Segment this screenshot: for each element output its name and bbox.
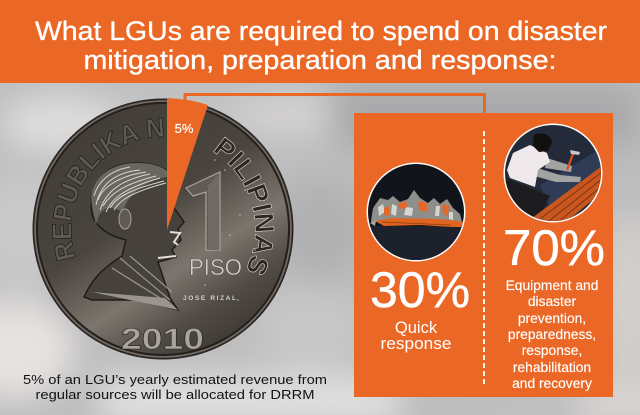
title: What LGUs are required to spend on disaster [35,16,607,46]
label: equipment and recovery: rehabilitation [513,360,591,375]
label: quick response: response [380,335,452,353]
numeral 1 [186,172,220,250]
one peso coin [32,98,294,360]
header banner [0,0,640,83]
label: equipment and recovery: prevention, [518,311,586,326]
title [35,16,607,75]
icon: rescue boat [366,162,466,262]
stat: 30 percent: 30% [370,262,470,318]
5% wedge: 5% [175,121,194,136]
label: quick response: Quick [395,319,438,337]
label: equipment and recovery: disaster [528,294,577,309]
label: equipment and recovery: response, [522,343,582,358]
portrait of Jose Rizal [84,163,184,310]
coin caption: regular sources will be allocated for DRRM [36,388,314,402]
coin caption: 5% of an LGU’s yearly estimated revenue from [23,373,327,387]
coin caption [23,373,327,402]
label: equipment and recovery: Equipment and [506,278,598,293]
panel: spending breakdown [354,113,613,397]
coin lettering: republika: REPUBLIKA N [52,118,164,261]
coin label: jose rizal: JOSE RIZAL [183,295,236,302]
title: mitigation, preparation and response: [84,45,556,75]
connector line from coin wedge to panel [185,94,484,114]
5% wedge [167,98,208,230]
speckles [204,159,256,301]
label: equipment and recovery [506,278,598,391]
coin lettering: pilipinas: PILIPINAS [213,136,274,275]
coin label: piso: PISO [189,254,242,280]
label: quick response [380,319,452,353]
label: equipment and recovery: and recovery [512,376,592,391]
icon: man hammering roof [504,124,602,225]
stat: 70 percent: 70% [503,220,605,276]
label: equipment and recovery: preparedness, [508,327,596,342]
coin label: year: 2010 [121,323,204,356]
